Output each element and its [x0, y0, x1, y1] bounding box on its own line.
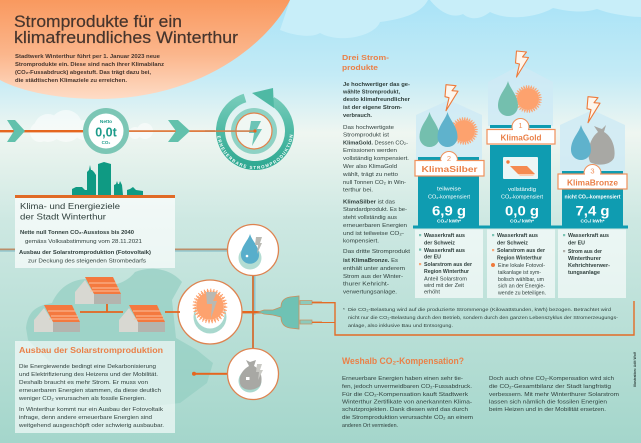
- intro text: (CO₂-Fussabdruck) abgestuft. Das trägt dazu bei,: [15, 70, 151, 76]
- products intro text: Emissionen werden: [343, 148, 397, 154]
- list: KlimaGold: Solarstrom aus der: [497, 248, 546, 254]
- solar expansion text: weitgehend ausgeschöpft oder schwierig ausbaubar.: [18, 423, 165, 429]
- text: compensation left column: Für die CO₂-Kompensation kauft Stadtwerk: [342, 392, 468, 398]
- icon: lightning: [516, 51, 528, 77]
- list: KlimaGold: Region Winterthur: [497, 256, 543, 262]
- goals text: gemäss Volksabstimmung vom 28.11.2021: [25, 239, 142, 245]
- list: KlimaBronze: der EU: [568, 240, 585, 246]
- power line top: [0, 130, 215, 132]
- net zero badge: [83, 108, 129, 154]
- heading: why compensation: Weshalb CO₂-Kompensation?: [342, 356, 464, 367]
- products intro text: ist KlimaBronze. Es: [343, 258, 398, 264]
- product: KlimaBronze: [558, 97, 627, 226]
- list: KlimaBronze: [558, 230, 626, 298]
- products intro text: terthur bei.: [343, 188, 374, 194]
- connector lines: [0, 248, 264, 376]
- title: klimafreundliches Winterthur: [14, 28, 238, 47]
- gold value block: vollständig: [508, 187, 536, 193]
- products intro text: und ist teilweise CO₂-: [343, 231, 404, 237]
- products intro text: vollständig kompensiert.: [343, 156, 410, 162]
- silver badge: 2: [447, 154, 451, 163]
- list: KlimaSilber: Wasserkraft aus: [424, 248, 465, 254]
- icon: blue drop: [571, 125, 591, 160]
- list: KlimaGold: Eine lokale Fotovol-: [498, 263, 545, 269]
- footnote: Die CO₂-Belastung wird auf die produzierte Strommenge (Kilowattstunden, kWh) bezogen. Betrachtet wird: [348, 307, 611, 312]
- silver value block: [418, 157, 479, 226]
- goals text: zur Deckung des steigenden Strombedarfs: [28, 258, 146, 264]
- gold house backdrop: [488, 65, 553, 126]
- icon: hydro circle: [228, 224, 278, 276]
- solar expansion text: weniger CO₂ verursachen als fossile Energien.: [18, 396, 147, 402]
- silver value block: 6,9 g: [432, 202, 466, 218]
- heading: goals: [20, 201, 120, 222]
- panel: climate and energy goals: [15, 195, 175, 268]
- products intro text: erneuerbaren Energien: [343, 223, 407, 229]
- text: compensation left column: [342, 376, 473, 429]
- solar expansion text: [18, 364, 165, 429]
- bronze value block: nicht CO₂-kompensiert: [564, 194, 621, 200]
- list: KlimaSilber: Wasserkraft aus: [424, 233, 465, 239]
- text: compensation left column: anderen Ort vermieden.: [342, 423, 398, 429]
- products intro text: Strom aus der Winter-: [343, 274, 403, 280]
- icon: blue drop: [438, 112, 458, 147]
- silver value block: teilweise: [437, 186, 461, 192]
- products intro text: desto klimafreundlicher: [343, 97, 411, 103]
- text: compensation right column: verbessern. Mit mehr Winterthurer Solarstrom: [489, 392, 619, 398]
- text: compensation left column: fen, jedoch unvermeidbaren CO₂-Fussabdruck.: [342, 384, 473, 390]
- product baseline bar: [413, 226, 628, 228]
- icon: solar circle: [178, 280, 242, 344]
- bronze value block: 7,4 g: [576, 202, 610, 218]
- list: KlimaGold: wende zu beteiligen.: [497, 290, 546, 296]
- gold value block: 0,0 g: [505, 202, 539, 218]
- gold value block: CO₂/ kWh*: [510, 218, 534, 224]
- clouds behind chevrons: [30, 110, 153, 142]
- footnote: anlage, also inklusive Bau und Entsorgung.: [348, 323, 453, 328]
- footnote frame: [312, 301, 634, 335]
- silver value block: CO₂-kompensiert: [428, 194, 471, 200]
- arrow: chevron left: [7, 120, 25, 142]
- goals text: [19, 230, 151, 264]
- intro text: Stadtwerk Winterthur führt per 1. Januar 2023 neue: [15, 54, 160, 60]
- silver house backdrop: [416, 100, 482, 175]
- arrow: chevron middle: [168, 120, 190, 142]
- title: [14, 12, 238, 47]
- solar expansion text: infrage, denn andere erneuerbare Energien sind: [19, 415, 152, 421]
- products intro text: KlimaGold. Dessen CO₂-: [343, 140, 408, 146]
- icon: lightning: [587, 97, 600, 123]
- list: KlimaSilber: erhöht: [424, 290, 440, 296]
- bronze house backdrop: [560, 110, 625, 175]
- products intro text: steht vollständig aus: [343, 215, 397, 221]
- credit: Illustration: Adit Wolf: [633, 351, 637, 387]
- icon: sun: [515, 86, 541, 112]
- products intro text: kompensiert.: [343, 238, 380, 244]
- intro text: die städtischen Klimaziele zu erreichen.: [15, 78, 127, 84]
- products intro text: KlimaSilber ist das: [343, 200, 395, 206]
- heading: goals: Klima- und Energieziele: [20, 201, 120, 211]
- gold badge: [487, 118, 555, 145]
- heading: solar expansion: Ausbau der Solarstromproduktion: [19, 345, 163, 355]
- list: KlimaGold: taikanlage ist sym-: [498, 270, 541, 276]
- orange sun blob: [0, 0, 290, 99]
- bronze value block: CO₂/ kWh*: [580, 218, 605, 224]
- products intro text: Stromprodukt ist: [343, 132, 390, 138]
- canton map shape: [26, 269, 213, 412]
- renewable production cycle icon: [205, 88, 294, 170]
- products intro text: thurer Kehricht-: [343, 282, 389, 288]
- icon: houses with solar roofs: [34, 277, 180, 332]
- gold badge: KlimaGold: [500, 132, 542, 142]
- text: compensation right column: [489, 376, 619, 413]
- solar expansion text: und Elektrifizierung des Heizens und der Mobilität.: [19, 372, 159, 378]
- text: compensation right column: die CO₂-Gesamtbilanz der Stadt langfristig: [489, 384, 611, 390]
- skyline: [72, 162, 143, 195]
- bronze value block: [562, 171, 623, 226]
- icon: waste circle: [228, 348, 278, 400]
- net zero badge: CO₂: [102, 140, 110, 145]
- goals text: Nette null Tonnen CO₂-Ausstoss bis 2040: [20, 230, 134, 236]
- products intro text: [342, 82, 411, 296]
- text: compensation left column: Erneuerbare Energien haben einen sehr tie-: [342, 376, 463, 382]
- list: KlimaBronze: Winterthurer: [568, 256, 602, 262]
- products intro text: ist der eigene Strom-: [343, 105, 402, 111]
- list: KlimaBronze: Kehrichtverwer-: [568, 263, 610, 269]
- solar expansion text: Deshalb braucht es mehr Strom. Er muss von: [19, 380, 148, 386]
- plug: [258, 296, 322, 329]
- gold badge: 1: [518, 121, 523, 130]
- footnote: *: [343, 307, 345, 312]
- products intro text: Wer also KlimaGold: [343, 164, 397, 170]
- text: compensation left column: Winterthur Zertifikate von anerkannten Klima-: [342, 400, 472, 406]
- net zero badge: 0,0t: [95, 126, 118, 140]
- panel: solar expansion: [15, 341, 175, 433]
- list: KlimaGold: sich an der Energie-: [498, 284, 545, 290]
- bronze badge: [558, 164, 627, 189]
- footnote: nicht nur die CO₂-Belastung durch den Betrieb, sondern durch den ganzen Lebenszyklus der Stromerzeugungs-: [348, 315, 618, 320]
- solar expansion text: In Winterthur kommt nur ein Ausbau der Fotovoltaik: [19, 407, 163, 413]
- list: KlimaBronze: Wasserkraft aus: [568, 233, 609, 239]
- bronze badge: KlimaBronze: [567, 178, 618, 188]
- silver badge: KlimaSilber: [422, 164, 478, 174]
- products intro text: verwertungsanlage.: [343, 290, 398, 296]
- heading: goals: der Stadt Winterthur: [20, 212, 106, 222]
- text: compensation right column: Doch auch ohne CO₂-Kompensation wird sich: [489, 376, 614, 382]
- silver value block: CO₂/ kWh*: [437, 218, 461, 224]
- list: KlimaSilber: Anteil Solarstrom: [424, 276, 467, 282]
- products intro text: Je hochwertiger das ge-: [343, 82, 410, 88]
- list: KlimaGold: bolisch wählbar, um: [498, 277, 544, 283]
- net zero badge: Netto: [100, 119, 112, 125]
- products intro text: Das hochwertigste: [343, 125, 394, 131]
- solar expansion text: Die Energiewende bedingt eine Dekarbonisierung: [19, 364, 156, 370]
- icon: lightning: [445, 85, 458, 111]
- products intro text: enthält unter anderem: [343, 266, 405, 272]
- goals text: Ausbau der Solarstromproduktion (Fotovoltaik): [19, 250, 151, 256]
- clouds top right: [280, 0, 641, 38]
- products intro text: null Tonnen CO₂ in Win-: [343, 180, 406, 186]
- gold value block: CO₂-kompensiert: [501, 194, 544, 200]
- products intro text: Das dritte Stromprodukt: [343, 249, 411, 255]
- heading: three products: produkte: [342, 63, 378, 72]
- intro text: [15, 54, 164, 84]
- product: KlimaGold: [487, 51, 555, 226]
- title: Stromprodukte für ein: [14, 12, 182, 31]
- products intro text: wählt, trägt zu netto: [342, 172, 398, 178]
- solar expansion text: erneuerbaren Energien stammen, da diese deutlich: [19, 388, 161, 394]
- products intro text: Standardprodukt. Es be-: [343, 207, 407, 213]
- list: KlimaSilber: Region Winterthur: [424, 269, 470, 275]
- heading: three products: [342, 53, 390, 72]
- list: KlimaSilber: der EU: [424, 254, 441, 260]
- text: compensation right column: beim Heizen und in der Mobilität ersetzen.: [489, 407, 607, 413]
- list: KlimaGold: der Schweiz: [497, 240, 528, 246]
- list: KlimaBronze: tungsanlage: [568, 270, 600, 276]
- bronze badge: 3: [590, 166, 595, 176]
- icon: teal drop: [498, 81, 518, 116]
- list: KlimaSilber: wird mit der Zeit: [423, 283, 464, 289]
- icon: waste bag: [588, 125, 615, 165]
- product: KlimaSilber: [415, 85, 484, 226]
- list: KlimaGold: Wasserkraft aus: [497, 233, 538, 239]
- text: compensation left column: schutzprojekten. Dank diesen wird das durch: [342, 407, 468, 413]
- gold value block: [490, 125, 551, 226]
- products intro text: wählte Stromprodukt,: [342, 90, 400, 96]
- icon: teal drop: [420, 112, 440, 147]
- renewable production cycle icon: ERNEUERBARE STROMPRODUKTION: [217, 134, 293, 170]
- list: KlimaSilber: der Schweiz: [424, 240, 455, 246]
- silver badge: [415, 152, 484, 176]
- footnote: [343, 307, 618, 328]
- list: KlimaSilber: [415, 230, 483, 298]
- text: compensation right column: lassen sich nämlich die fossilen Energien: [489, 400, 607, 406]
- heading: three products: Drei Strom-: [342, 53, 390, 62]
- list: KlimaGold: [487, 230, 555, 298]
- products intro text: verbrauch.: [343, 113, 372, 119]
- list: KlimaSilber: Solarstrom aus der: [424, 262, 473, 268]
- icon: sun: [451, 118, 477, 144]
- text: compensation left column: die Stromproduktion verursachte CO₂ an einem: [342, 415, 473, 421]
- list: KlimaBronze: Strom aus der: [568, 249, 603, 255]
- intro text: Stromprodukte ein. Diese sind nach ihrer Klimabilanz: [15, 62, 164, 68]
